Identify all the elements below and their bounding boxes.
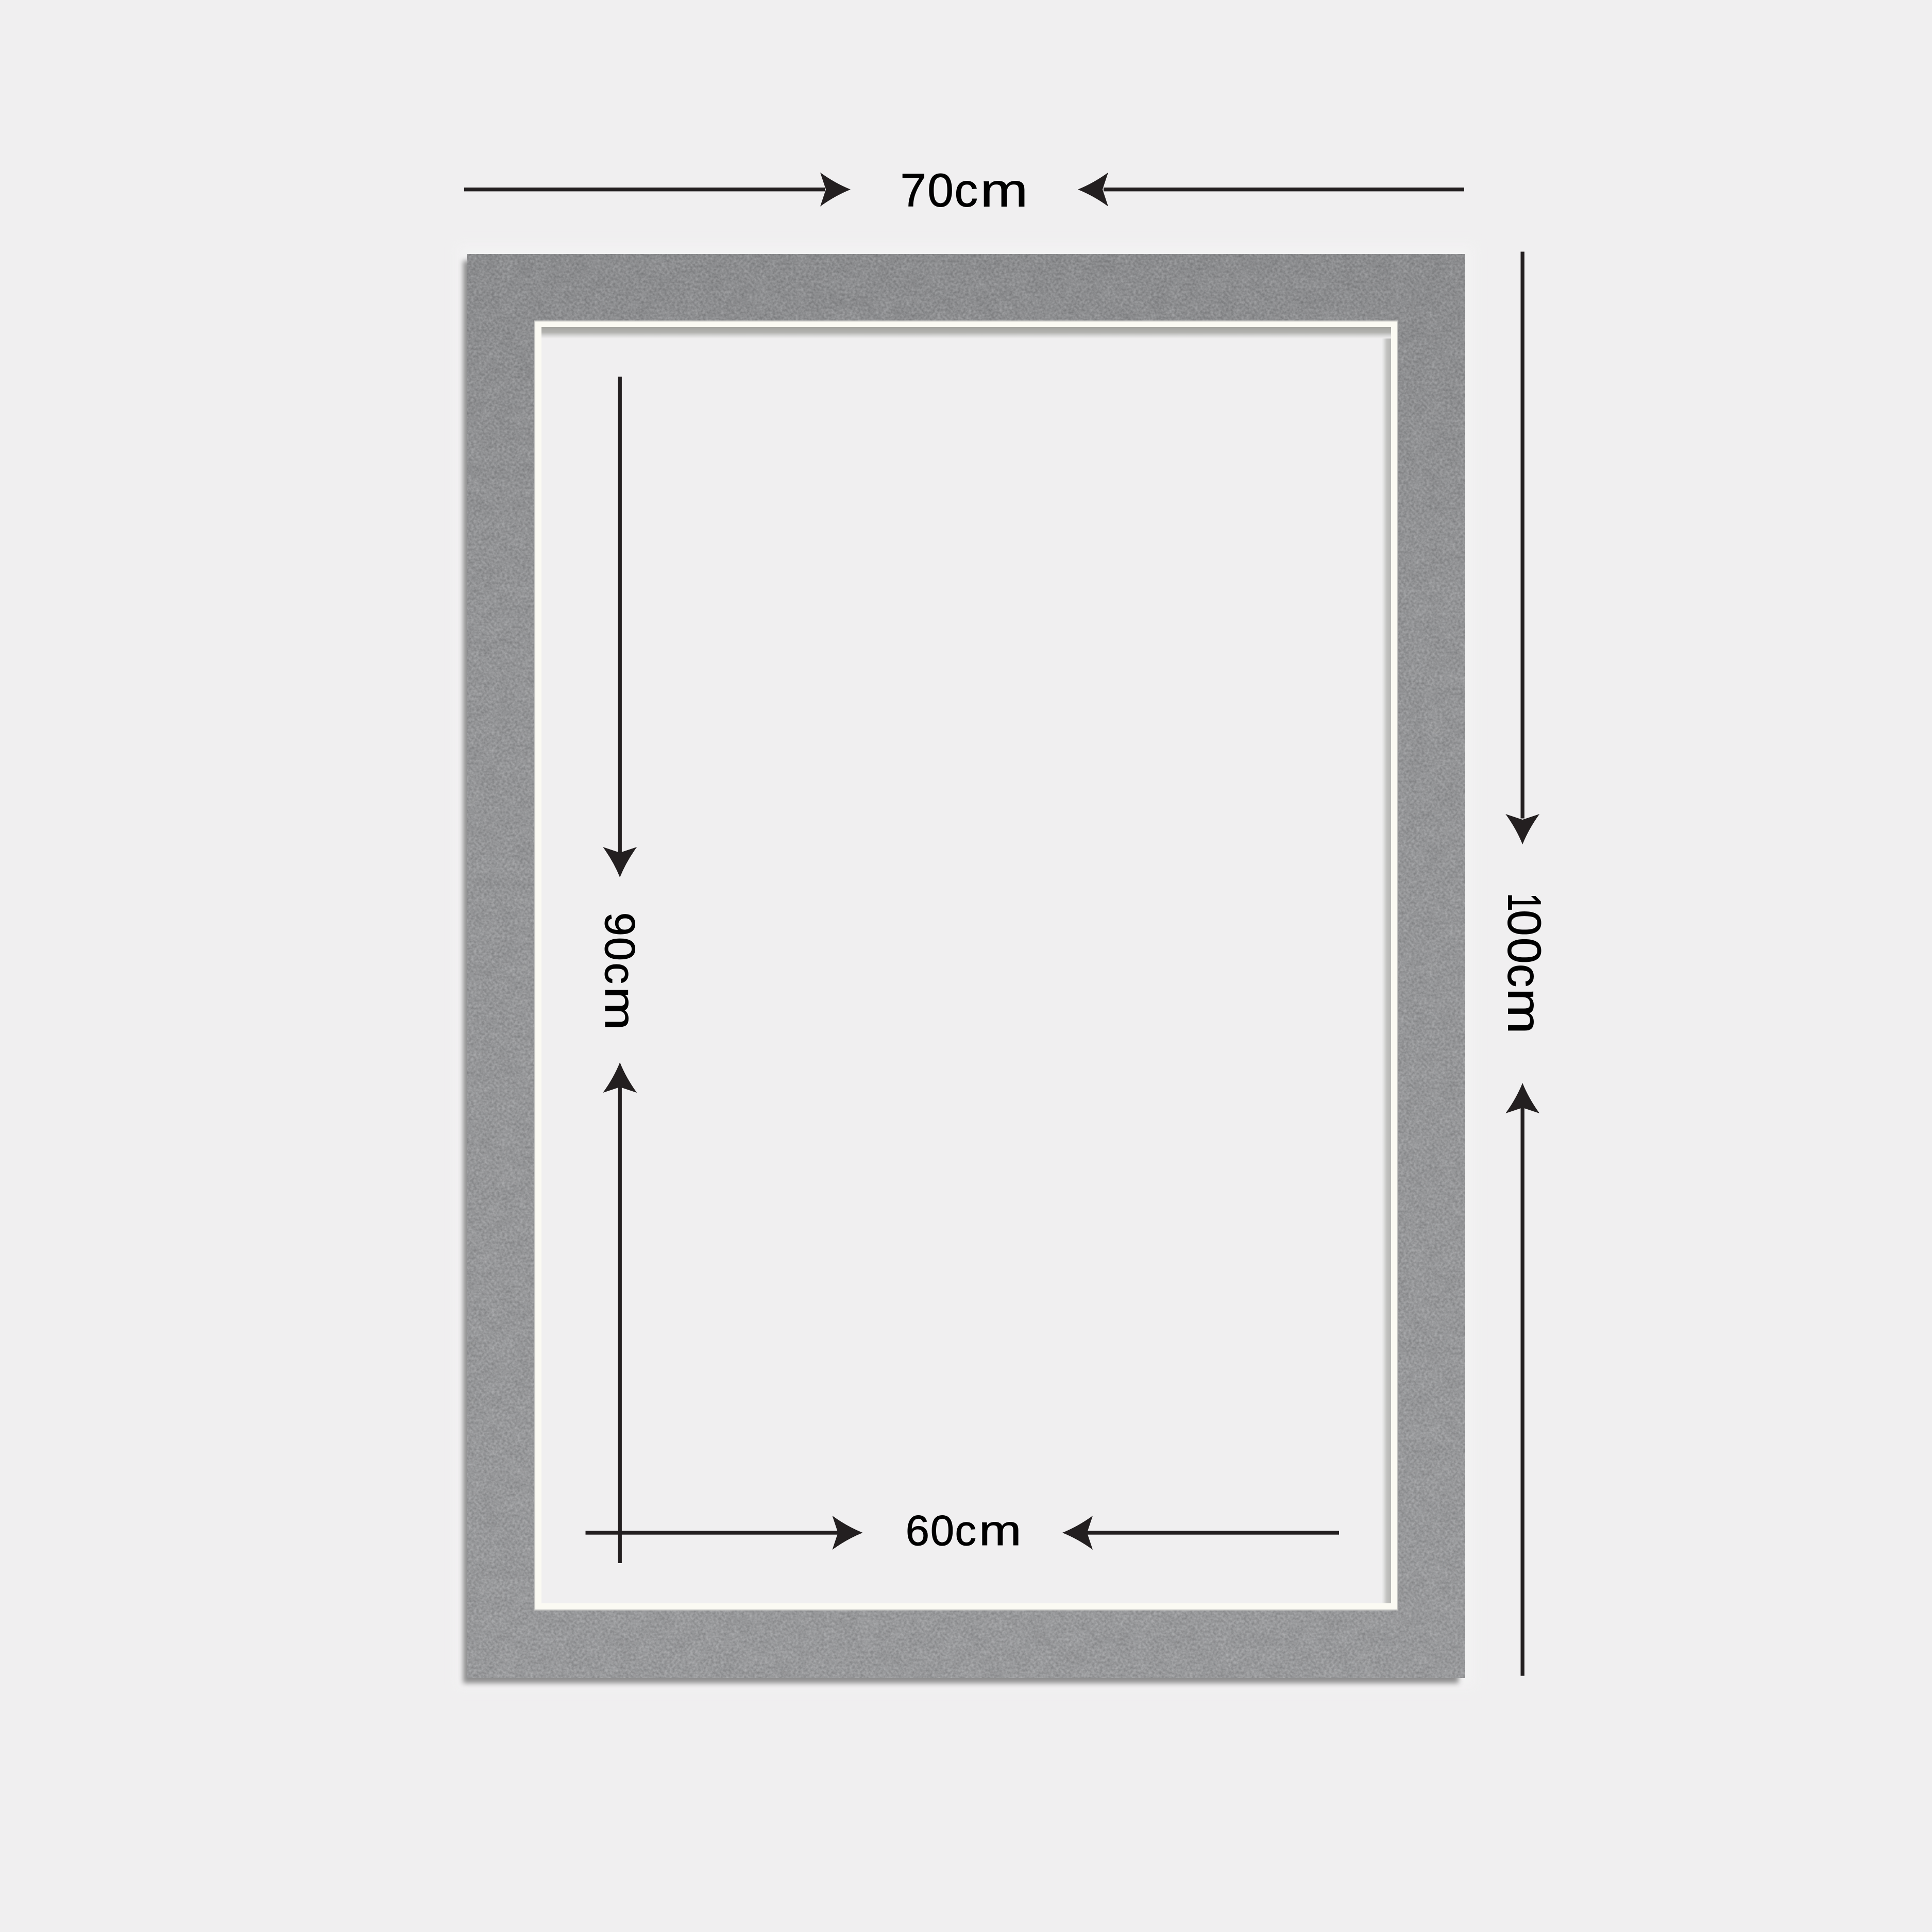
label: outer height: 0 (1498, 910, 1550, 936)
label: inner width: 0 (930, 1506, 954, 1554)
inner white mat border (535, 321, 1398, 1610)
arrow: inner width, left side (585, 1516, 862, 1550)
label: outer width: m (980, 165, 1028, 217)
panel: grey mat board frame (456, 243, 1476, 1689)
label: outer width: 7 (901, 165, 926, 217)
arrow: outer width, right side (1078, 173, 1464, 207)
arrow: outer width, left side (464, 173, 851, 207)
label: outer height: c (1498, 964, 1550, 987)
label: outer height: 1 (1498, 893, 1550, 911)
arrow: inner height, top side (603, 377, 637, 877)
label: inner height: 0 (596, 937, 644, 961)
arrow: inner height, bottom side (603, 1062, 637, 1563)
label: inner height: c (596, 962, 644, 984)
label: inner width: m (979, 1506, 1021, 1554)
label: inner height: m (596, 987, 644, 1030)
dimension diagram (460, 172, 1541, 1687)
label: inner width: c (955, 1506, 976, 1554)
label: outer height: m (1498, 988, 1550, 1034)
label: inner width: 6 (906, 1506, 929, 1554)
label: outer height: 0 (1498, 938, 1550, 964)
label: inner height: 9 (596, 912, 644, 936)
label: outer width: c (954, 165, 978, 217)
arrow: outer height, bottom side (1505, 1083, 1539, 1676)
label: outer width: 0 (927, 165, 954, 217)
arrow: inner width, right side (1062, 1516, 1339, 1550)
arrow: outer height, top side (1505, 251, 1539, 844)
